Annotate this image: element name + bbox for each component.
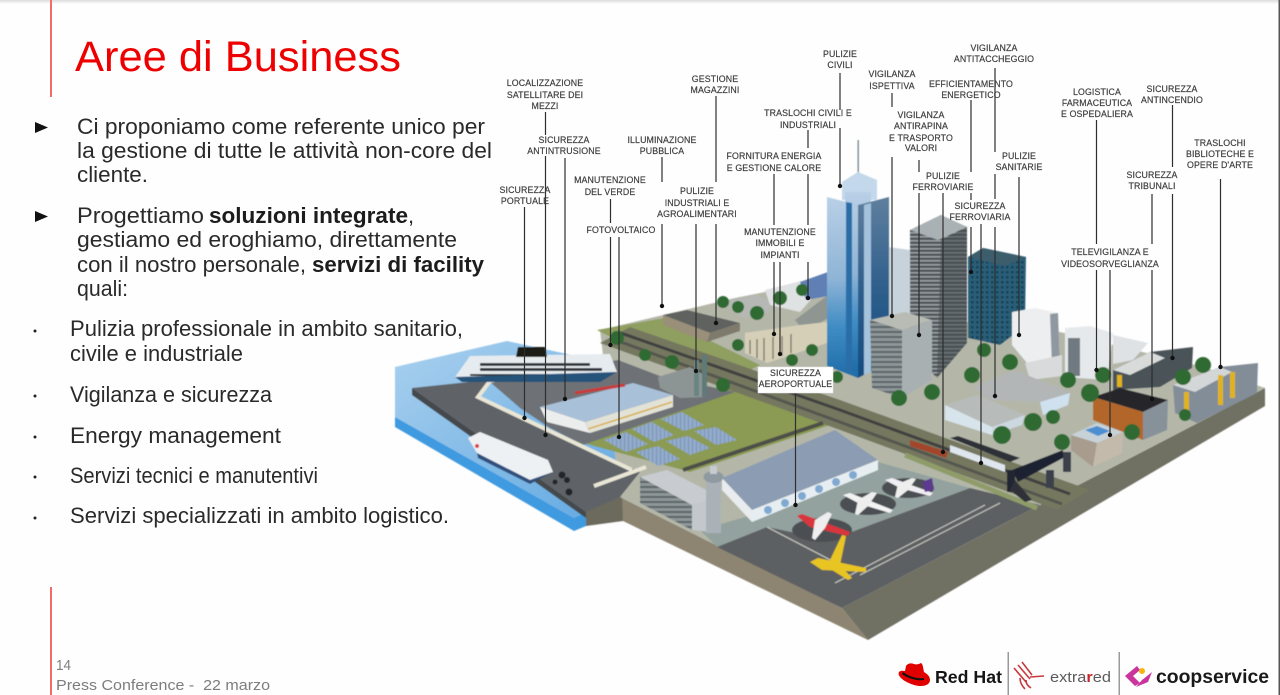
text block: intro paragraph: la gestione di tutte le attività non-core del bbox=[77, 138, 492, 163]
callout: manutenzione del verde bbox=[574, 175, 646, 347]
text block: second paragraph: servizi di facility bbox=[312, 252, 485, 277]
callout: sicurezza ferroviaria bbox=[950, 201, 1010, 465]
callout: efficientamento energetico bbox=[929, 79, 1013, 274]
callout: pulizie sanitarie: SANITARIE bbox=[996, 162, 1042, 172]
callout: logistica farmaceutica e ospedaliera: FARMACEUTICA bbox=[1062, 98, 1132, 108]
callout: vigilanza ispettiva: ISPETTIVA bbox=[869, 81, 915, 91]
callout: traslochi biblioteche e opere d'arte bbox=[1186, 138, 1254, 369]
dark right office bbox=[1113, 347, 1193, 390]
text block: second paragraph: soluzioni integrate bbox=[209, 203, 408, 228]
footbridge bbox=[1007, 450, 1071, 502]
callout: illuminazione pubblica: PUBBLICA bbox=[640, 146, 684, 156]
callout: manutenzione immobili e impianti: MANUTENZIONE bbox=[744, 227, 816, 237]
callout: vigilanza ispettiva bbox=[868, 69, 916, 318]
right end building bbox=[1173, 363, 1258, 423]
footer text: Press Conference - 22 marzo bbox=[56, 677, 270, 694]
callout: manutenzione del verde: DEL VERDE bbox=[585, 187, 635, 197]
bullet list: services: Servizi tecnici e manutentivi bbox=[70, 463, 318, 488]
port terminal building bbox=[540, 383, 673, 433]
callout: sicurezza antincendio: SICUREZZA bbox=[1147, 84, 1197, 94]
white low-rise buildings bbox=[1012, 308, 1148, 380]
callout: sicurezza antintrusione bbox=[527, 135, 601, 401]
callout: localizzazione satellitare dei mezzi: SATELLITARE DEI bbox=[507, 90, 583, 100]
callout: localizzazione satellitare dei mezzi bbox=[507, 78, 583, 437]
callout: sicurezza aeroportuale bbox=[758, 367, 833, 507]
text block: second paragraph: Progettiamo bbox=[77, 203, 204, 228]
text block: intro paragraph bbox=[35, 114, 492, 187]
callout: traslochi civili e industriali: INDUSTRIALI bbox=[780, 120, 836, 130]
callout: fornitura energia e gestione calore: FORNITURA ENERGIA bbox=[727, 151, 821, 161]
airport apron bbox=[700, 462, 970, 547]
callout: pulizie sanitarie bbox=[996, 151, 1042, 337]
title: Aree di Business bbox=[75, 33, 401, 81]
warehouses bbox=[945, 370, 1070, 435]
bullet list: services: Vigilanza e sicurezza bbox=[70, 382, 273, 407]
callout: sicurezza portuale: PORTUALE bbox=[501, 196, 549, 206]
callout: vigilanza antitaccheggio bbox=[954, 43, 1034, 398]
dark blue tower bbox=[968, 248, 1026, 345]
callout: pulizie ferroviarie: PULIZIE bbox=[926, 171, 960, 181]
planes bbox=[797, 478, 934, 580]
port ground bbox=[490, 360, 735, 445]
callout: efficientamento energetico: ENERGETICO bbox=[941, 90, 1001, 100]
red accent line bottom bbox=[50, 587, 52, 695]
office tower left of tall tower bbox=[888, 247, 910, 322]
callout: pulizie civili: CIVILI bbox=[827, 60, 853, 70]
bullet list: services bbox=[34, 316, 463, 528]
text block: second paragraph bbox=[35, 203, 485, 301]
control tower bbox=[704, 466, 724, 533]
callout: pulizie sanitarie: PULIZIE bbox=[1002, 151, 1036, 161]
logo: extrared: extrared bbox=[1050, 669, 1111, 686]
callout: traslochi biblioteche e opere d'arte: TRASLOCHI bbox=[1194, 138, 1246, 148]
callout: vigilanza ispettiva: VIGILANZA bbox=[868, 69, 916, 79]
main blue tower bbox=[827, 140, 889, 378]
callout: gestione magazzini: MAGAZZINI bbox=[691, 85, 739, 95]
callout: sicurezza aeroportuale: SICUREZZA bbox=[770, 368, 821, 378]
callout: sicurezza antincendio bbox=[1141, 84, 1203, 360]
callout: sicurezza antintrusione: SICUREZZA bbox=[539, 135, 589, 145]
callout: pulizie ferroviarie bbox=[913, 171, 973, 454]
callout: pulizie industriali e agroalimentari: PULIZIE bbox=[680, 186, 714, 196]
callout: traslochi civili e industriali bbox=[764, 108, 852, 300]
callout: vigilanza antirapina e trasporto valori: E TRASPORTO bbox=[889, 133, 953, 143]
callout: sicurezza portuale bbox=[500, 185, 550, 420]
grey office tower bbox=[870, 312, 932, 398]
callout: televigilanza e videosorveglianza: TELEVIGILANZA E bbox=[1071, 247, 1149, 257]
callout: logistica farmaceutica e ospedaliera bbox=[1061, 87, 1133, 372]
callout: traslochi civili e industriali: TRASLOCHI CIVILI E bbox=[764, 108, 852, 118]
callout: illuminazione pubblica: ILLUMINAZIONE bbox=[627, 135, 697, 145]
logo: extrared bbox=[1014, 662, 1111, 689]
ferry bbox=[455, 347, 617, 382]
text block: second paragraph: quali: bbox=[77, 276, 128, 301]
callout: sicurezza aeroportuale: AEROPORTUALE bbox=[759, 379, 832, 389]
callout: pulizie civili bbox=[823, 49, 857, 188]
callout: illuminazione pubblica bbox=[627, 135, 697, 308]
rail and road strip bbox=[600, 327, 1090, 510]
tall grey tower bbox=[910, 215, 967, 378]
houses bbox=[730, 272, 828, 332]
callout: sicurezza tribunali: SICUREZZA bbox=[1127, 170, 1177, 180]
water block bbox=[395, 341, 640, 531]
land block side faces bbox=[586, 388, 1265, 640]
text block: intro paragraph: Ci proponiamo come referente unico per bbox=[77, 114, 485, 139]
callout: traslochi biblioteche e opere d'arte: OPERE D'ARTE bbox=[1187, 160, 1253, 170]
bullet list: services: Servizi specializzati in ambito logistico. bbox=[70, 503, 449, 528]
callout: logistica farmaceutica e ospedaliera: E OSPEDALIERA bbox=[1061, 109, 1133, 119]
logo: coopservice: coopservice bbox=[1156, 667, 1269, 688]
trees bbox=[610, 284, 1211, 450]
callout: pulizie industriali e agroalimentari bbox=[657, 186, 737, 373]
callout: pulizie civili: PULIZIE bbox=[823, 49, 857, 59]
airport office building bbox=[640, 470, 720, 533]
callout: sicurezza ferroviaria: SICUREZZA bbox=[955, 201, 1005, 211]
dark plane stands bbox=[792, 478, 934, 542]
callout: fornitura energia e gestione calore bbox=[727, 151, 821, 336]
text block: second paragraph: gestiamo ed eroghiamo, direttamente bbox=[77, 227, 457, 252]
callout: manutenzione immobili e impianti: IMPIANTI bbox=[760, 250, 800, 260]
parked cars on pier bbox=[552, 472, 572, 496]
text block: second paragraph: , bbox=[408, 203, 414, 228]
beige small building bbox=[1071, 423, 1123, 467]
callout: localizzazione satellitare dei mezzi: LOCALIZZAZIONE bbox=[507, 78, 583, 88]
logo divider bbox=[1008, 652, 1009, 695]
logo: Red Hat: Red Hat bbox=[935, 667, 1002, 687]
callout: manutenzione del verde: MANUTENZIONE bbox=[574, 175, 646, 185]
callout: fotovoltaico bbox=[587, 225, 655, 439]
callout: efficientamento energetico: EFFICIENTAMENTO bbox=[929, 79, 1013, 89]
callout: televigilanza e videosorveglianza: VIDEOSORVEGLIANZA bbox=[1061, 259, 1159, 269]
page number: 14 bbox=[56, 658, 71, 674]
callout: sicurezza antincendio: ANTINCENDIO bbox=[1141, 95, 1203, 105]
text block: second paragraph: con il nostro personale, bbox=[77, 252, 306, 277]
apartment block bbox=[745, 322, 827, 363]
warehouse back bbox=[663, 310, 740, 342]
logo: Red Hat bbox=[899, 663, 1002, 687]
callout: localizzazione satellitare dei mezzi: MEZZI bbox=[532, 101, 558, 111]
callout: sicurezza ferroviaria: FERROVIARIA bbox=[950, 212, 1010, 222]
back green verge bbox=[597, 318, 760, 385]
illustration: isometric city bbox=[395, 140, 1265, 640]
bullet list: services: Energy management bbox=[70, 423, 281, 448]
callout: vigilanza antirapina e trasporto valori bbox=[889, 110, 953, 337]
callout: sicurezza portuale: SICUREZZA bbox=[500, 185, 550, 195]
callout: traslochi biblioteche e opere d'arte: BIBLIOTECHE E bbox=[1186, 149, 1254, 159]
callout: sicurezza antintrusione: ANTINTRUSIONE bbox=[527, 146, 601, 156]
trains bbox=[910, 440, 1005, 472]
callout: gestione magazzini: GESTIONE bbox=[692, 74, 738, 84]
tanker bbox=[468, 432, 553, 484]
callout: fotovoltaico: FOTOVOLTAICO bbox=[587, 225, 655, 235]
green field bbox=[583, 385, 830, 472]
callout: vigilanza antirapina e trasporto valori: VALORI bbox=[905, 143, 937, 153]
bullet list: services: Pulizia professionale in ambito sanitario, bbox=[70, 316, 463, 341]
logo divider bbox=[1118, 652, 1120, 695]
callout: sicurezza tribunali bbox=[1127, 170, 1177, 401]
land top surface bbox=[600, 280, 1265, 608]
airport tarmac bbox=[717, 488, 1040, 608]
pier bbox=[412, 372, 646, 518]
callout: gestione magazzini bbox=[691, 74, 739, 325]
bullet list: services: civile e industriale bbox=[70, 341, 243, 366]
right edge line bbox=[1278, 0, 1280, 695]
callout: logistica farmaceutica e ospedaliera: LOGISTICA bbox=[1073, 87, 1121, 97]
callout: vigilanza antirapina e trasporto valori: VIGILANZA bbox=[897, 110, 945, 120]
runway markings bbox=[767, 503, 1000, 583]
orange roof building bbox=[1093, 388, 1168, 440]
callout: vigilanza antirapina e trasporto valori: ANTIRAPINA bbox=[894, 121, 948, 131]
callout: fornitura energia e gestione calore: E GESTIONE CALORE bbox=[727, 163, 821, 173]
callout: televigilanza e videosorveglianza bbox=[1061, 247, 1159, 437]
callout: manutenzione immobili e impianti bbox=[744, 227, 816, 356]
red accent line top bbox=[50, 0, 52, 97]
top shadow band bbox=[0, 0, 1280, 4]
callout: vigilanza antitaccheggio: ANTITACCHEGGIO bbox=[954, 54, 1034, 64]
green verge by runway bbox=[905, 455, 1037, 508]
callout: pulizie industriali e agroalimentari: AGROALIMENTARI bbox=[657, 209, 737, 219]
callout: manutenzione immobili e impianti: IMMOBILI E bbox=[755, 238, 805, 248]
callout: pulizie ferroviarie: FERROVIARIE bbox=[913, 182, 973, 192]
airport terminal bbox=[722, 430, 878, 522]
plant building bbox=[658, 355, 707, 398]
solar panels bbox=[604, 412, 737, 466]
callout: pulizie industriali e agroalimentari: INDUSTRIALI E bbox=[665, 198, 729, 208]
callout: vigilanza antitaccheggio: VIGILANZA bbox=[970, 43, 1018, 53]
callout: sicurezza tribunali: TRIBUNALI bbox=[1128, 181, 1176, 191]
text block: intro paragraph: cliente. bbox=[77, 162, 148, 187]
